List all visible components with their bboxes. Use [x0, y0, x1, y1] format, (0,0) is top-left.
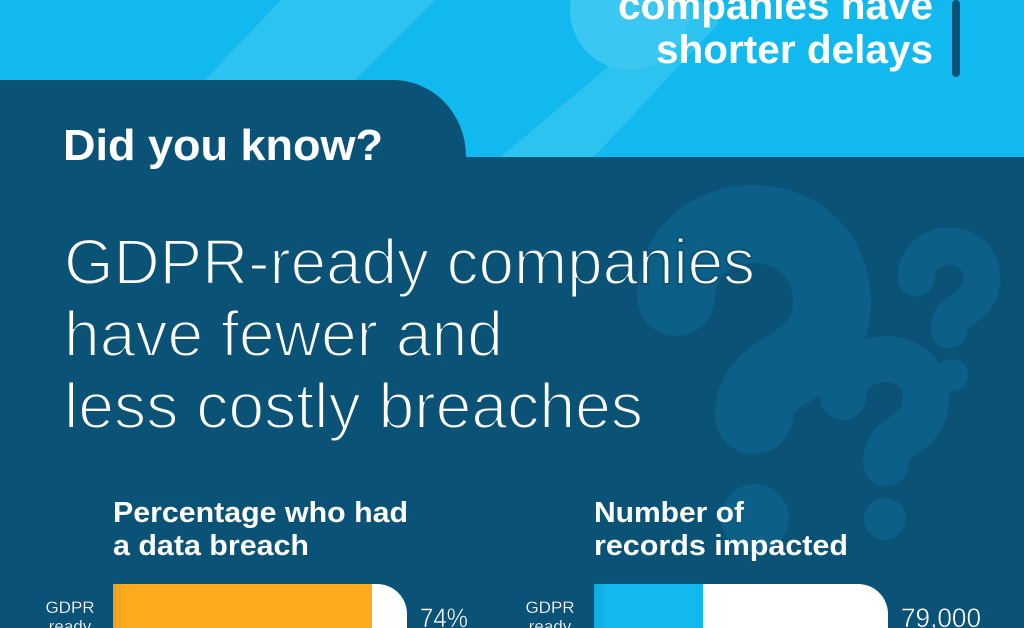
- bar: 74%: [113, 584, 407, 628]
- heading: did you know: Did you know?: [63, 121, 383, 170]
- top light blue band: [0, 0, 1024, 160]
- headline: GDPR-ready companies: [64, 226, 755, 298]
- chart: percentage who had a data breach: [45, 497, 468, 628]
- row label: GDPR ready: GDPR: [525, 598, 575, 617]
- row label: GDPR ready: GDPR: [45, 598, 95, 617]
- chart title: percentage: a data breach: [113, 530, 309, 562]
- icon: question marks: [676, 224, 982, 552]
- callout: shorter delays: shorter delays: [656, 28, 933, 72]
- chart title: records: records impacted: [594, 530, 848, 562]
- headline: less costly breaches: [64, 370, 643, 442]
- row label: GDPR ready: [46, 602, 94, 628]
- headline: have fewer and: [64, 298, 503, 370]
- headline: [64, 226, 755, 442]
- row label: GDPR ready: [526, 602, 574, 628]
- bar: 79,000: [594, 584, 888, 628]
- chart title: percentage: Percentage who had: [113, 497, 408, 529]
- chart title: records: [594, 497, 848, 562]
- chart: number of records impacted: [525, 497, 981, 628]
- chart title: percentage: [114, 501, 406, 556]
- callout: shorter delays: [618, 0, 960, 77]
- chart title: records: Number of: [594, 497, 744, 529]
